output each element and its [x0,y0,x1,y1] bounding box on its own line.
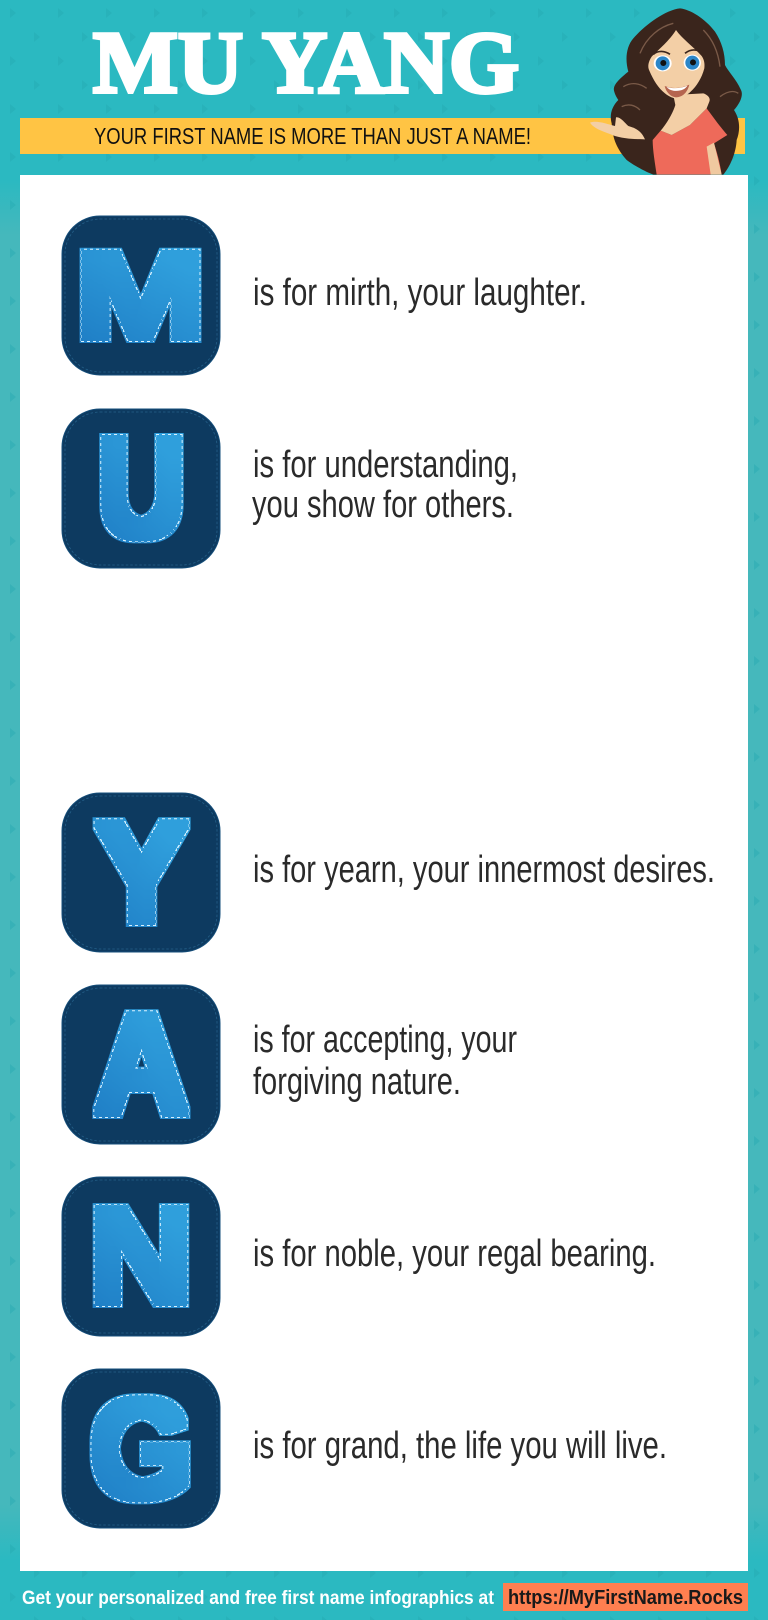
icon: stitched letter N tile [62,1177,220,1336]
icon: stitched letter A tile: A [95,985,188,1144]
icon: stitched letter Y tile [62,793,220,952]
icon: stitched letter N tile: N [89,1180,193,1331]
text: meaning of N: is for noble, your regal bearing. [253,1233,656,1275]
row: letter U [62,408,518,568]
icon: stitched letter Y tile: Y [96,793,187,952]
text: meaning of U: is for understanding, [253,444,518,486]
text: meaning of U [252,444,518,526]
footer call to action: Get your personalized and free first name infographics at [22,1588,495,1609]
icon: stitched letter U tile: U [98,408,185,566]
text: meaning of M: is for mirth, your laughter. [253,272,587,314]
row: letter Y [62,793,715,952]
text: meaning of A: forgiving nature. [253,1061,461,1103]
icon: stitched letter M tile [62,216,220,375]
row: letter A [62,985,517,1144]
website link badge: https://MyFirstName.Rocks [508,1587,743,1609]
title: MU YANG [93,15,519,112]
tagline banner [20,118,745,154]
text: meaning of U: you show for others. [252,484,514,526]
icon: stitched letter G tile: G [90,1370,193,1527]
icon: stitched letter A tile [62,985,220,1144]
tagline banner: YOUR FIRST NAME IS MORE THAN JUST A NAME! [94,123,531,149]
icon: stitched letter U tile [62,408,220,568]
icon: cartoon woman presenting [590,8,742,175]
row: letter N [62,1177,656,1336]
row: letter G [62,1369,667,1528]
row: letter M [62,216,587,375]
icon: stitched letter M tile: M [75,227,206,363]
text: meaning of A: is for accepting, your [253,1019,517,1061]
footer [22,1583,748,1611]
icon: stitched letter G tile [62,1369,220,1528]
text: meaning of A [253,1019,517,1103]
